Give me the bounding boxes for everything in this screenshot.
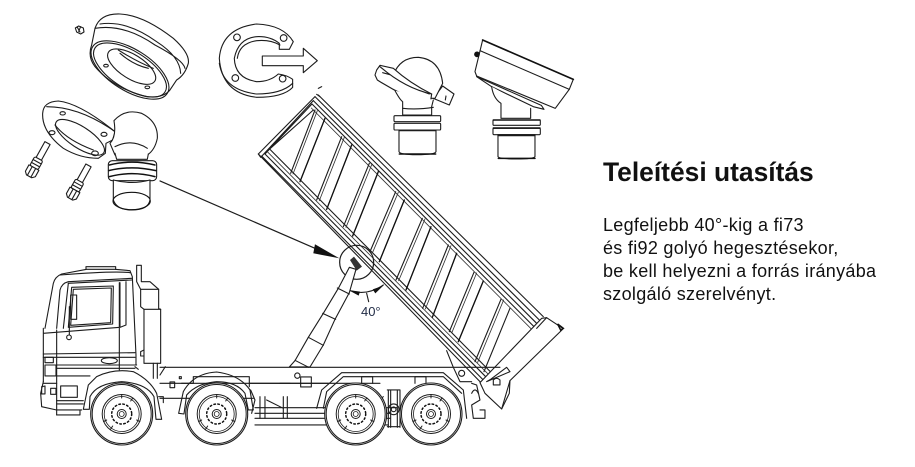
icon: small screw [75, 26, 84, 34]
hydraulic cylinder [289, 267, 356, 367]
title: Teleítési utasítás [603, 157, 814, 187]
truck cab [41, 267, 137, 415]
instruction text: és fi92 golyó hegesztésekor, [603, 238, 839, 258]
instruction text: be kell helyezni a forrás irányába [603, 261, 876, 281]
instruction text [603, 215, 876, 304]
rear fender and hinge bracket [280, 351, 485, 427]
rear wheel 1 [325, 383, 387, 445]
top rail lines [258, 94, 540, 329]
icon: split flange [43, 101, 115, 162]
front fenders [83, 367, 253, 419]
front wheel 2 [186, 383, 248, 445]
exhaust and air intake [137, 265, 161, 378]
icon: clamp ring with direction arrow [219, 24, 317, 97]
icon: assembled ball with clamp [375, 57, 454, 155]
front wheel 1 [91, 383, 153, 445]
tail gate [480, 318, 563, 409]
leader arrow to hinge detail [160, 181, 339, 258]
icon: assembled housing on ball [474, 40, 573, 159]
bottom rail lines [258, 149, 493, 382]
hinge detail circle [340, 245, 374, 279]
instruction text: szolgáló szerelvényt. [603, 284, 776, 304]
icon: ball with stem [108, 112, 157, 210]
icon: ball seat housing [82, 14, 188, 111]
tipper body [258, 87, 543, 382]
floor ribs [291, 110, 510, 372]
chassis frame [160, 367, 500, 425]
rear wheel 2 [400, 383, 462, 445]
icon: bolts [24, 140, 93, 201]
instruction text: Legfeljebb 40°-kig a fi73 [603, 215, 804, 235]
angle label: 40° [361, 304, 381, 319]
tilt angle mark [348, 285, 383, 319]
